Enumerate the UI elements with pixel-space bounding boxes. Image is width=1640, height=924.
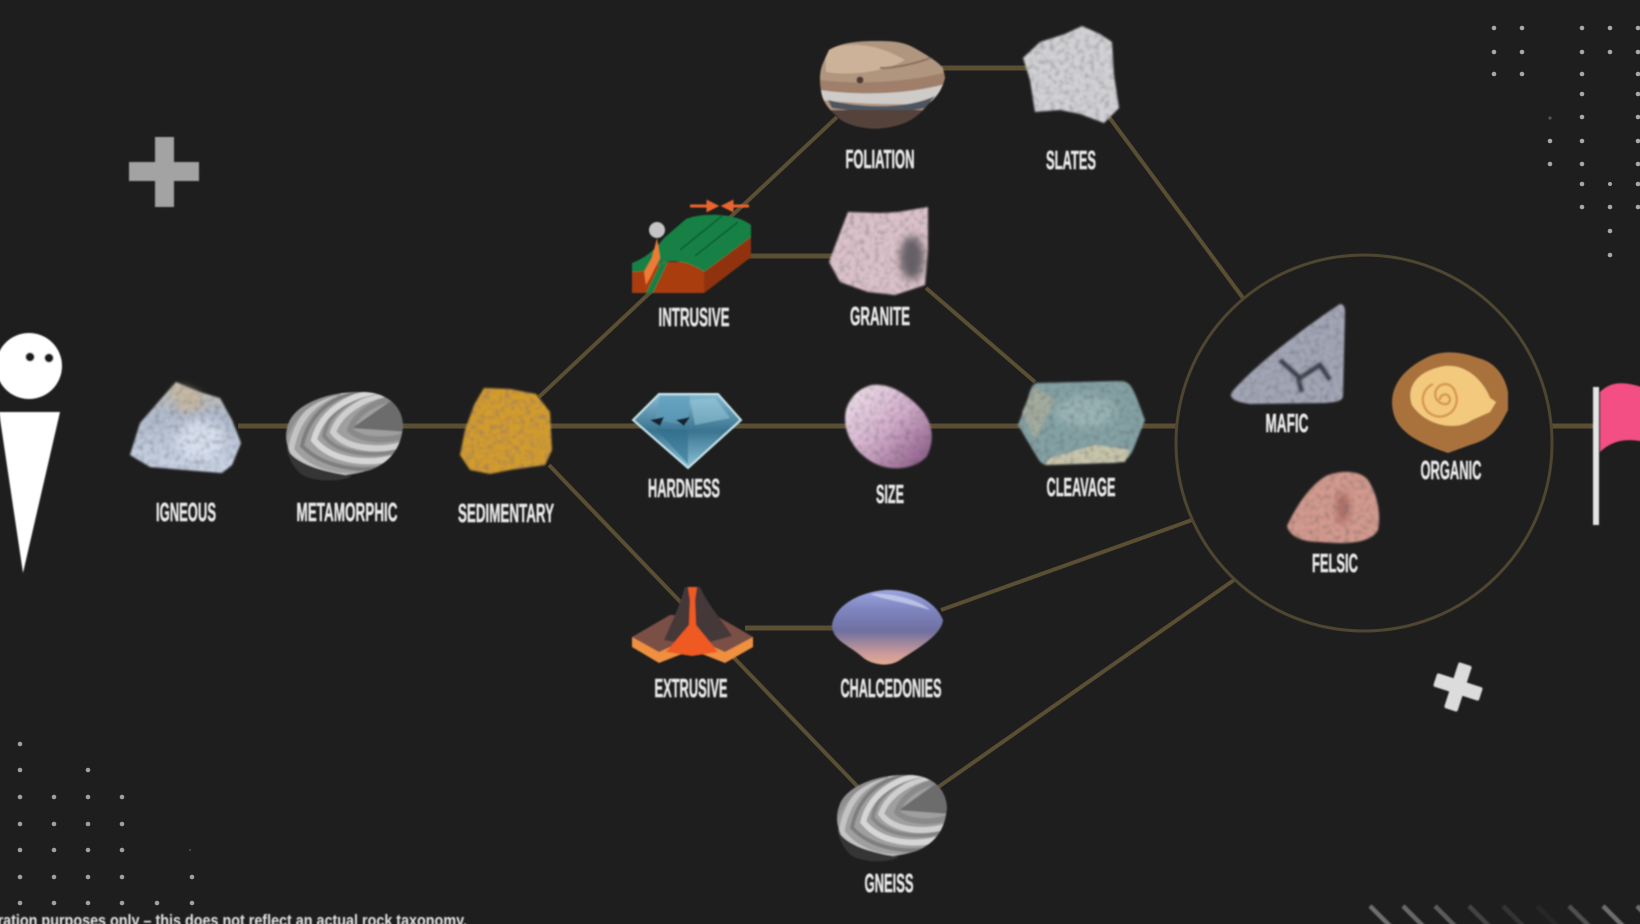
icon: intrusive tectonic block: [632, 202, 751, 293]
rock: hardness diamond: [633, 394, 741, 468]
label: igneous: IGNEOUS: [156, 497, 216, 527]
icon: finish flag: [1593, 383, 1640, 525]
icon: extrusive volcano: [632, 587, 753, 663]
icon: plus bottom right: [1428, 657, 1488, 717]
icon: plus top left: [129, 137, 199, 207]
rock taxonomy journey diagram: SIZE: [876, 479, 904, 509]
rock taxonomy journey diagram: FOLIATION: [846, 144, 914, 174]
label: intrusive: INTRUSIVE: [658, 302, 730, 332]
rock taxonomy journey diagram: FELSIC: [1312, 548, 1358, 578]
rock: sedimentary: [460, 388, 552, 474]
rock: igneous: [130, 382, 241, 473]
rock: granite: [829, 207, 928, 295]
rock: slates: [1023, 26, 1119, 123]
rock: organic ammonite: [1392, 352, 1508, 453]
dots top right: [1492, 26, 1640, 257]
label: granite: GRANITE: [850, 301, 910, 331]
label: mafic: MAFIC: [1266, 408, 1309, 438]
rock: cleavage: [1018, 381, 1145, 465]
rock taxonomy journey diagram: CLEAVAGE: [1046, 472, 1116, 502]
rock taxonomy journey diagram: CHALCEDONIES: [840, 673, 942, 703]
rock taxonomy journey diagram: HARDNESS: [648, 473, 720, 503]
label: metamorphic: METAMORPHIC: [296, 497, 398, 527]
rock: gneiss: [834, 771, 952, 861]
rock: foliation: [819, 40, 946, 130]
rock: metamorphic: [283, 388, 408, 480]
rock taxonomy journey diagram: SLATES: [1046, 145, 1096, 175]
hatch marks bottom right: [1370, 906, 1640, 924]
end cluster circle: [1176, 255, 1552, 631]
rock taxonomy journey diagram: ORGANIC: [1420, 455, 1482, 485]
arrows: plate compression: [690, 202, 749, 210]
connector lines: [238, 68, 1597, 790]
rock taxonomy journey diagram: EXTRUSIVE: [654, 673, 728, 703]
rock: mafic: [1231, 304, 1345, 404]
dots bottom left: [18, 742, 194, 905]
rock taxonomy journey diagram: GNEISS: [864, 868, 914, 898]
label: sedimentary: SEDIMENTARY: [458, 498, 554, 528]
icon: person marker: [0, 333, 62, 573]
rock: chalcedonies: [832, 590, 943, 665]
rock: size crystal: [845, 385, 932, 468]
rock: felsic: [1287, 472, 1379, 543]
